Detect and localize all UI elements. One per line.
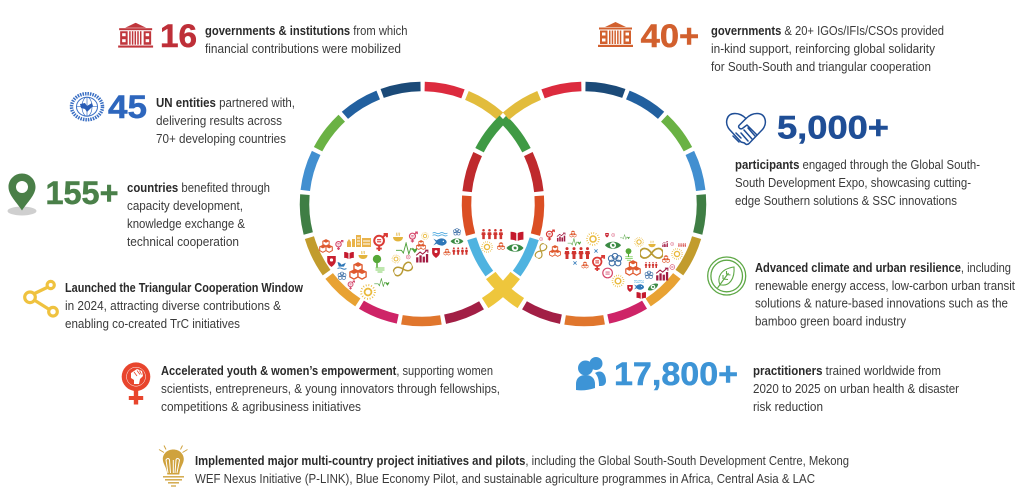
stat: 45 UN entities (72, 89, 295, 146)
item: multi-country project initiatives: WEF Nexus Initiative (P-LINK), Blue Economy Pilot, and sustainable agriculture programmes in Africa, Central Asia & LAC (195, 471, 815, 486)
venn diagram: right SDG ring (418, 38, 750, 370)
item: climate and urban resilience: bamboo green board industry (755, 314, 906, 328)
venn diagram: left SDG ring (256, 38, 588, 370)
stat: 5,000+ participants: South Development Expo, showcasing cutting- (735, 175, 971, 190)
stat: 40+ governments: governments & 20+ IGOs/IFIs/CSOs provided (711, 23, 944, 38)
item: multi-country project initiatives (159, 446, 849, 486)
item: youth and women's empowerment: competitions & agribusiness initiatives (161, 399, 361, 414)
stat: 17,800+ practitioners: 17,800+ (614, 356, 738, 392)
stat: 45 UN entities: 70+ developing countries (156, 131, 286, 146)
icon: two people (576, 357, 606, 390)
stat: 5,000+ participants: participants engaged through the Global South- (735, 157, 980, 172)
stat: 155+ countries (8, 174, 270, 249)
item: triangular cooperation window: in 2024, attracting diverse contributions & (65, 298, 281, 313)
SDG icon cluster: right (534, 230, 686, 299)
stat: 16 governments and institutions: governments & institutions from which (205, 23, 408, 38)
icon: leaf in circle (708, 257, 746, 295)
item: youth and women's empowerment: Accelerated youth & women’s empowerment, supporting women (161, 363, 493, 378)
SDG icon cluster: centre (481, 229, 524, 252)
item: multi-country project initiatives: Implemented major multi-country project initiatives and pilots, including the Global South-South Development Centre, Mekong (195, 453, 849, 468)
stat: 17,800+ practitioners: risk reduction (753, 399, 823, 414)
stat: 45 UN entities: 45 (108, 89, 147, 125)
stat: 40+ governments: 40+ (641, 18, 699, 54)
stat: 155+ countries: knowledge exchange & (127, 216, 245, 231)
stat: 155+ countries: countries benefited through (127, 180, 270, 195)
item: youth and women's empowerment: scientists, entrepreneurs, & young innovators through fellowships, (161, 381, 500, 396)
stat: 40+ governments: for South-South and triangular cooperation (711, 59, 931, 74)
item: triangular cooperation window (25, 280, 304, 331)
stat: 5,000+ participants (727, 110, 980, 208)
item: youth and women's empowerment (122, 362, 500, 414)
stat: 16 governments and institutions (118, 18, 408, 56)
stat: 5,000+ participants: 5,000+ (777, 110, 889, 146)
item: triangular cooperation window: enabling co-created TrC initiatives (65, 316, 240, 331)
stat: 17,800+ practitioners: 2020 to 2025 on urban health & disaster (753, 381, 960, 396)
stat: 155+ countries: capacity development, (127, 198, 243, 213)
item: climate and urban resilience (708, 257, 1015, 328)
stat: 16 governments and institutions: 16 (160, 18, 197, 54)
item: triangular cooperation window: Launched the Triangular Cooperation Window (65, 280, 304, 295)
stat: 5,000+ participants: edge Southern solutions & SSC innovations (735, 193, 957, 208)
stat: 16 governments and institutions: financial contributions were mobilized (205, 41, 401, 56)
stat: 155+ countries: 155+ (46, 175, 118, 211)
stat: 40+ governments: in-kind support, reinforcing global solidarity (711, 41, 935, 56)
stat: 155+ countries: technical cooperation (127, 234, 239, 249)
icon: light bulb (159, 446, 188, 486)
icon: map pin (8, 174, 36, 216)
icon: female symbol with fist (122, 362, 150, 404)
icon: share nodes (25, 281, 57, 316)
SDG icon cluster: left (320, 228, 468, 299)
stat: 17,800+ practitioners (576, 356, 960, 414)
icon: orange institution building (598, 22, 633, 47)
stat: 45 UN entities: delivering results across (156, 113, 282, 128)
stat: 45 UN entities: UN entities partnered with, (156, 95, 295, 110)
stat: 17,800+ practitioners: practitioners trained worldwide from (753, 363, 941, 378)
icon: handshake in heart (727, 114, 765, 144)
icon: UN emblem (72, 94, 102, 120)
stat: 40+ governments (598, 18, 944, 74)
item: climate and urban resilience: Advanced climate and urban resilience, including (755, 260, 1011, 275)
icon: red institution building (118, 23, 153, 48)
